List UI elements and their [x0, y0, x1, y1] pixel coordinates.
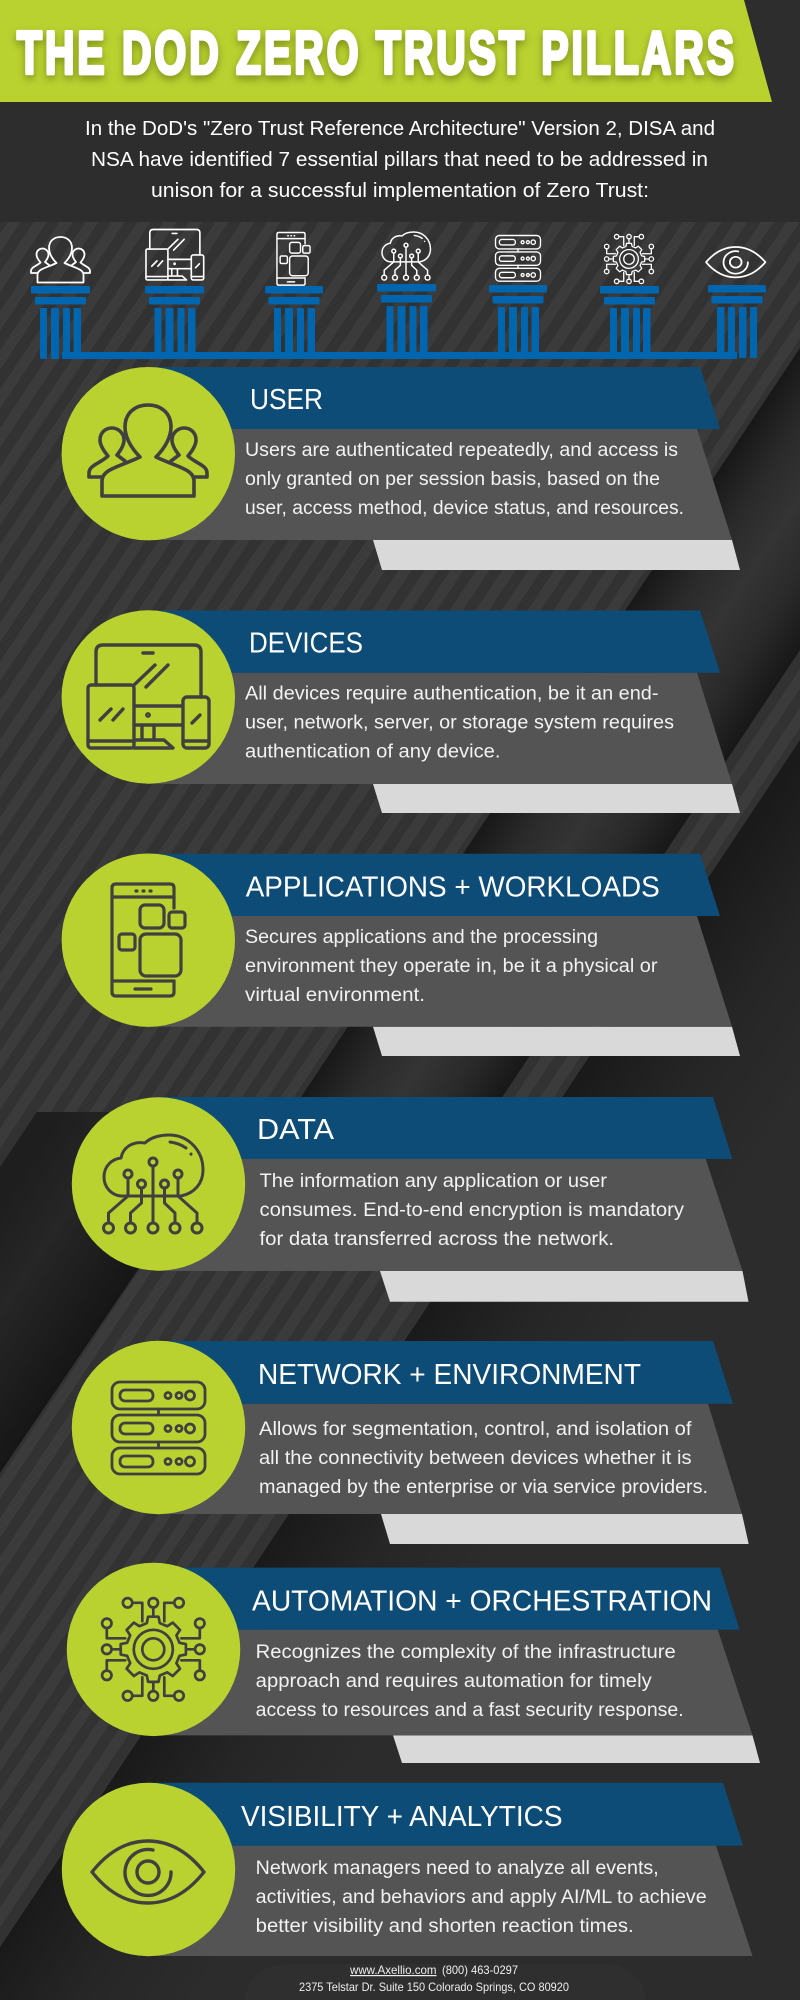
- panel: data: [72, 1097, 749, 1302]
- panel: network + environment: [72, 1341, 749, 1544]
- body: only granted on per session basis, based on the: [245, 469, 660, 490]
- body: environment they operate in, be it a physical or: [245, 956, 658, 977]
- icon: gear: [102, 1598, 204, 1700]
- icon: server: [495, 235, 540, 281]
- body: user, network, server, or storage system requires: [245, 712, 674, 734]
- icon: cloud data: [104, 1135, 203, 1233]
- body: better visibility and shorten reaction times.: [256, 1916, 634, 1937]
- intro text: [85, 117, 715, 202]
- icon: eye: [92, 1841, 204, 1903]
- body: access to resources and a fast security response.: [256, 1700, 684, 1721]
- connecting bar: [62, 352, 737, 359]
- heading: APPLICATIONS + WORKLOADS: [246, 872, 660, 904]
- icon: cloud data: [382, 232, 430, 280]
- body: The information any application or user: [260, 1171, 608, 1192]
- body: [245, 927, 658, 1006]
- footer: 2375 Telstar Dr. Suite 150 Colorado Springs, CO 80920: [299, 1980, 569, 1994]
- panel: devices: [62, 610, 740, 813]
- intro text: NSA have identified 7 essential pillars that need to be addressed in: [91, 148, 708, 171]
- heading: NETWORK + ENVIRONMENT: [258, 1359, 641, 1391]
- panel: visibility + analytics: [62, 1783, 753, 1956]
- body: Allows for segmentation, control, and isolation of: [259, 1419, 692, 1440]
- pillar: user: [31, 286, 90, 359]
- circle: [72, 1341, 245, 1514]
- footer: [299, 1963, 569, 1994]
- pillar: automation: [600, 286, 659, 359]
- panel: automation + orchestration: [67, 1563, 760, 1763]
- circle: [62, 367, 235, 540]
- circle: [72, 1097, 245, 1271]
- icon: applications: [277, 232, 310, 285]
- body: [245, 440, 684, 519]
- pillar: devices: [145, 286, 204, 359]
- body: all the connectivity between devices whether it is: [259, 1448, 692, 1469]
- body: [245, 684, 674, 762]
- intro text: In the DoD's "Zero Trust Reference Architecture" Version 2, DISA and: [85, 117, 715, 140]
- body: Recognizes the complexity of the infrastructure: [256, 1642, 676, 1663]
- intro text: unison for a successful implementation of Zero Trust:: [151, 179, 649, 202]
- body: Users are authenticated repeatedly, and access is: [245, 440, 678, 461]
- title banner: [0, 0, 772, 102]
- footer: (800) 463-0297: [442, 1963, 518, 1977]
- body: consumes. End-to-end encryption is mandatory: [260, 1200, 685, 1221]
- pillar: visibility: [708, 285, 766, 358]
- body: for data transferred across the network.: [260, 1229, 614, 1250]
- panel: applications + workloads: [62, 854, 740, 1056]
- pillar: network: [489, 285, 547, 359]
- heading: DATA: [257, 1114, 335, 1146]
- body: approach and requires automation for timely: [256, 1671, 652, 1692]
- body: user, access method, device status, and resources.: [245, 498, 684, 519]
- panel: user: [62, 367, 740, 570]
- icon: eye: [706, 247, 765, 277]
- body: [259, 1419, 708, 1498]
- icon: user: [31, 237, 90, 282]
- icon: server: [112, 1382, 205, 1474]
- circle: [62, 854, 235, 1027]
- body: [256, 1642, 684, 1721]
- body: Network managers need to analyze all events,: [256, 1858, 659, 1879]
- body: authentication of any device.: [245, 742, 500, 762]
- body: virtual environment.: [245, 985, 425, 1006]
- footer: www.Axellio.com: [349, 1963, 436, 1977]
- heading: VISIBILITY + ANALYTICS: [241, 1801, 562, 1833]
- icon: gear: [604, 234, 654, 284]
- icon: devices: [88, 645, 209, 748]
- circle: [62, 1783, 235, 1956]
- icon: user: [89, 405, 207, 496]
- circle: [67, 1563, 240, 1736]
- pillar: data: [377, 284, 436, 359]
- body: Secures applications and the processing: [245, 927, 598, 948]
- circle: [62, 610, 235, 784]
- pillar: applications: [265, 286, 323, 359]
- heading: USER: [250, 384, 323, 416]
- body: All devices require authentication, be it an end-: [245, 684, 658, 704]
- pillars diagram: [31, 229, 766, 359]
- body: managed by the enterprise or via service providers.: [259, 1477, 708, 1498]
- icon: devices: [146, 229, 204, 280]
- body: [256, 1858, 707, 1937]
- body: [260, 1171, 685, 1250]
- icon: applications: [112, 884, 185, 996]
- body: activities, and behaviors and apply AI/ML to achieve: [256, 1887, 707, 1908]
- heading: AUTOMATION + ORCHESTRATION: [252, 1586, 712, 1618]
- heading: DEVICES: [249, 628, 363, 660]
